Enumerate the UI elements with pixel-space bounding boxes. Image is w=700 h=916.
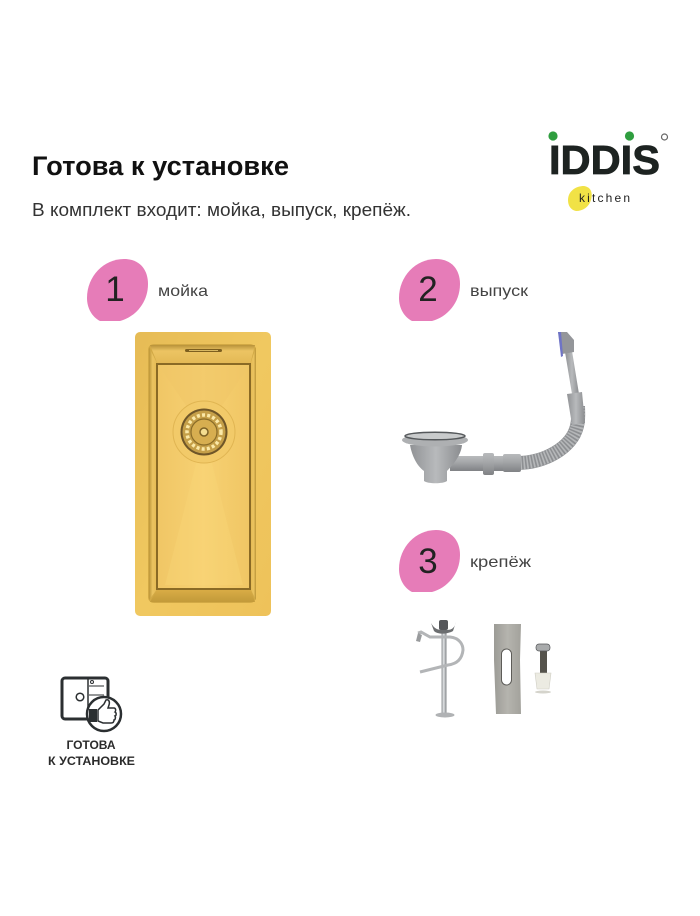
- screw with sleeve: [535, 644, 551, 694]
- vertical overflow tube: [565, 351, 579, 394]
- icon caption line 2: К УСТАНОВКЕ: [48, 754, 135, 768]
- badge 2 with label: [399, 259, 529, 321]
- horizontal pipe and nuts: [450, 456, 518, 471]
- flange: [402, 434, 468, 446]
- flexible hose: [517, 406, 578, 463]
- badge 1 with label: 1: [105, 270, 125, 309]
- badge 1 with label: [87, 259, 208, 321]
- badge 3 with label: крепёж: [470, 554, 531, 571]
- overflow head: [558, 332, 574, 354]
- logo: IDDIS kitchen: IDDIS: [549, 137, 660, 183]
- fasteners: [416, 620, 551, 718]
- drain outlet assembly: [402, 332, 585, 483]
- logo: IDDIS kitchen: [548, 131, 668, 211]
- badge 3 with label: 3: [418, 542, 438, 581]
- icon: ready to install: [62, 678, 121, 731]
- badge 1 with label: мойка: [158, 283, 208, 300]
- clamp plate: [494, 624, 521, 714]
- title: Готова к установке: [32, 151, 289, 181]
- T-bolt clip: [416, 620, 463, 718]
- badge 2 with label: выпуск: [470, 283, 529, 300]
- icon caption: ГОТОВА: [66, 738, 116, 752]
- bowl body: [410, 445, 462, 483]
- badge 3 with label: [399, 530, 531, 592]
- sink drain: [173, 401, 235, 463]
- logo: IDDIS kitchen: kitchen: [579, 191, 630, 205]
- badge 2 with label: 2: [418, 270, 438, 309]
- gold sink: [135, 332, 271, 616]
- subtitle text: В комплект входит: мойка, выпуск, крепёж.: [32, 200, 411, 220]
